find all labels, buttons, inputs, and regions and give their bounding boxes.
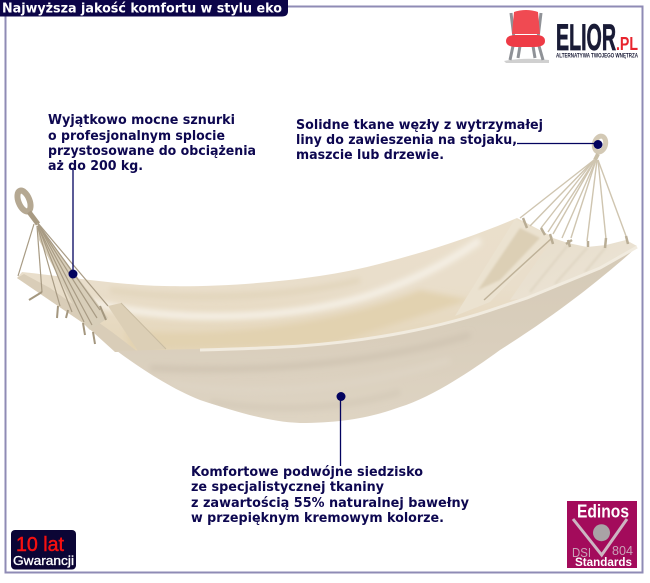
- badge: 10 years warranty: Gwarancji: [13, 554, 74, 568]
- right panel folds: [530, 245, 606, 292]
- callout: knots: Solidne tkane węzły z wytrzymałej: [296, 117, 543, 133]
- logo: Elior.pl: [504, 10, 638, 63]
- left rope loop: [15, 189, 38, 224]
- cloth folds: [90, 219, 553, 351]
- badge: 10 years warranty: 10 lat: [16, 534, 64, 556]
- right end panel: [510, 238, 637, 300]
- badge: Edinos standards: 804: [612, 543, 633, 558]
- right fringe knots: [523, 218, 628, 248]
- hammock illustration: [15, 135, 637, 423]
- callout: ropes: Wyjątkowo mocne sznurki: [48, 112, 235, 128]
- callout: ropes: [48, 112, 256, 278]
- callout: knots: [296, 117, 602, 163]
- callout: ropes: aż do 200 kg.: [48, 158, 143, 174]
- front panel rim highlight: [200, 247, 637, 350]
- left rope bundle: [37, 223, 108, 330]
- callout: ropes: o profesjonalnym splocie: [48, 128, 225, 144]
- badge: Edinos standards: DSI: [572, 545, 591, 560]
- callout: knots: liny do zawieszenia na stojaku,: [296, 132, 517, 148]
- icon: red chair: [504, 10, 549, 63]
- front cloth panel: [117, 247, 637, 423]
- right rope loop: [593, 135, 607, 160]
- callout: seat: ze specjalistycznej tkaniny: [191, 479, 384, 495]
- logo domain: .PL: [616, 34, 638, 54]
- badge: Edinos standards: Standards: [575, 555, 632, 569]
- title bar: Najwyższa jakość komfortu w stylu eko: [2, 0, 282, 16]
- callout: seat: w przepięknym kremowym kolorze.: [191, 510, 444, 526]
- right ropes: [520, 160, 626, 241]
- badge: Edinos standards: Edinos: [577, 502, 629, 522]
- left ropes: [18, 222, 108, 325]
- callout: knots: maszcie lub drzewie.: [296, 147, 444, 163]
- front panel mottling: [156, 361, 343, 408]
- badge: Edinos standards: [567, 501, 637, 569]
- badge: 10 years warranty: [11, 530, 76, 570]
- callout: ropes: przystosowane do obciążenia: [48, 143, 256, 159]
- callout: seat: Komfortowe podwójne siedzisko: [191, 464, 423, 480]
- back cloth panel: [17, 218, 553, 352]
- callout: seat: z zawartością 55% naturalnej bawełny: [191, 495, 469, 511]
- left folded fringe edge: [17, 274, 138, 352]
- callout: seat: [191, 392, 469, 526]
- left fringe tassels: [29, 292, 106, 344]
